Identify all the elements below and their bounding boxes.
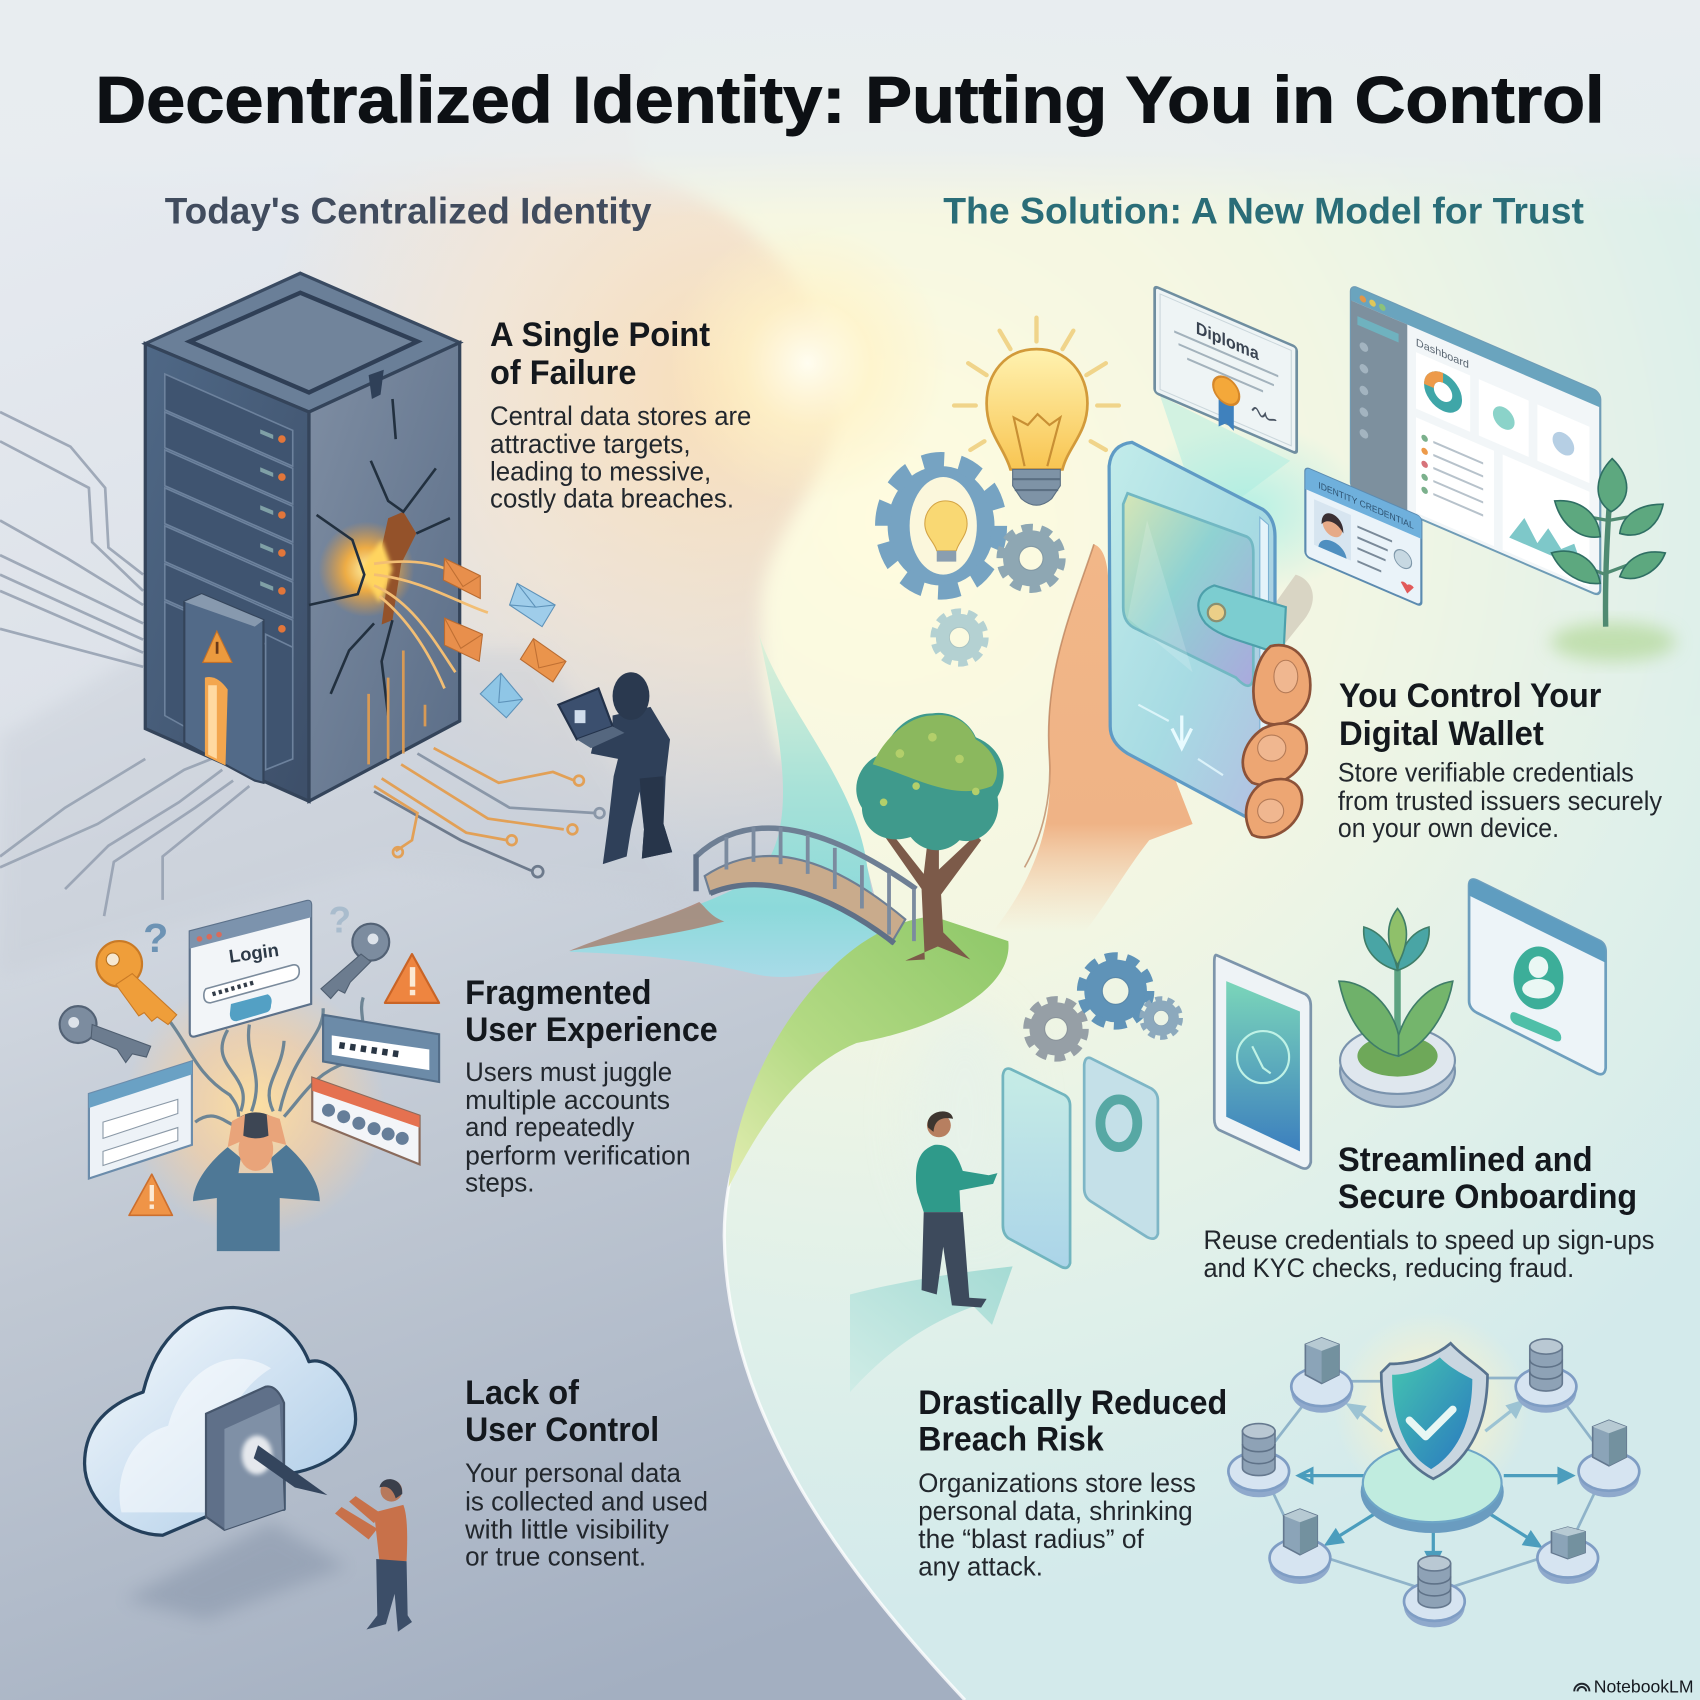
sapling beside dashboard: [1550, 459, 1676, 661]
stolen data envelopes: [443, 558, 566, 718]
text: drastically reduced breach risk: the “blast radius” of: [918, 1523, 1144, 1554]
blocked key arrow: [254, 1445, 327, 1495]
title: Decentralized Identity: Putting You in Control: [95, 64, 1605, 138]
text: a single point of failure: attractive targets,: [490, 428, 691, 459]
text: streamlined and secure onboarding: Secure Onboarding: [1338, 1178, 1637, 1216]
faded question mark: ?: [329, 899, 351, 940]
text: drastically reduced breach risk: Organizations store less: [918, 1467, 1196, 1498]
server breach light: [360, 540, 392, 603]
text: you control your digital wallet: on your own device.: [1338, 812, 1559, 843]
dashboard window: Dashboard: [1416, 337, 1469, 371]
orange key: [96, 941, 177, 1025]
network arrows: [1299, 1402, 1572, 1566]
text: drastically reduced breach risk: any attack.: [918, 1550, 1043, 1581]
background: floor shadow: [0, 651, 694, 976]
text: you control your digital wallet: from trusted issuers securely: [1338, 785, 1662, 816]
leaking data lines: [374, 562, 488, 688]
tree: [856, 713, 1004, 961]
server crack seam: [369, 370, 384, 399]
diploma credential: Diploma: [1196, 318, 1260, 364]
background: warm glow: [195, 0, 1062, 922]
background: white edge of path: [724, 1014, 965, 1700]
tablet with fingerprint: [1214, 955, 1311, 1169]
text: fragmented user experience: steps.: [465, 1167, 535, 1198]
ID credential card: [1305, 467, 1421, 606]
text: drastically reduced breach risk: Breach Risk: [918, 1421, 1104, 1459]
decentralized network diagram: [1228, 1312, 1639, 1627]
server crack opening: [382, 512, 416, 624]
cloud shadow: [125, 1522, 347, 1620]
text: a single point of failure: leading to messive,: [490, 455, 711, 486]
text: streamlined and secure onboarding: Streamlined and: [1338, 1141, 1593, 1179]
text: fragmented user experience: User Experience: [465, 1011, 718, 1049]
text: you control your digital wallet: Store verifiable credentials: [1338, 757, 1634, 788]
right column heading: The Solution: A New Model for Trust: [943, 190, 1584, 231]
text: lack of user control: is collected and used: [465, 1485, 708, 1516]
dashboard window: [1351, 285, 1600, 596]
text: drastically reduced breach risk: personal data, shrinking: [918, 1495, 1193, 1526]
text: lack of user control: Your personal data: [465, 1457, 682, 1488]
fragmented login illustration: [60, 899, 439, 1251]
text: lack of user control: or true consent.: [465, 1541, 646, 1572]
idea bulb: [954, 318, 1119, 505]
server top face: [145, 273, 460, 412]
text: lack of user control: Lack of: [465, 1374, 579, 1412]
text: a single point of failure: costly data breaches.: [490, 482, 734, 513]
key light: [242, 1435, 272, 1474]
text: streamlined and secure onboarding: and KYC checks, reducing fraud.: [1203, 1252, 1574, 1283]
wallet highlight: [1128, 520, 1193, 672]
wallet button: [1208, 604, 1225, 621]
gears with small bulb: [883, 461, 1062, 663]
text: a single point of failure: [490, 316, 751, 513]
river stream: [569, 634, 884, 977]
onboarding gears: [1027, 957, 1180, 1058]
text: drastically reduced breach risk: [918, 1384, 1227, 1581]
wallet strap: [1198, 585, 1286, 651]
background: solution side lower: [724, 716, 1700, 1700]
circuit traces under server: [374, 748, 604, 877]
text: fragmented user experience: and repeatedly: [465, 1111, 635, 1142]
ID credential card: IDENTITY CREDENTIAL: [1318, 480, 1414, 532]
platform: [1361, 1451, 1504, 1533]
text: a single point of failure: of Failure: [490, 354, 636, 392]
crack lines: [309, 399, 450, 716]
left column heading: Today's Centralized Identity: [165, 190, 652, 231]
background: lit ground patch: [911, 1008, 1019, 1225]
server breach glow: [319, 521, 414, 617]
network nodes: [1291, 1367, 1352, 1413]
text: lack of user control: with little visibility: [464, 1513, 669, 1544]
login window: Login: [227, 939, 280, 967]
glass panel one: [1003, 1069, 1070, 1268]
text: fragmented user experience: perform verification: [465, 1139, 691, 1170]
server rack slots: [165, 374, 293, 770]
red password window: [312, 1078, 420, 1164]
digital wallet phone: [1109, 442, 1286, 820]
onboarding path arrow: [850, 1266, 1013, 1392]
password bar: [323, 1015, 439, 1082]
phone side rim: [1260, 517, 1268, 811]
background: sun glow: [667, 222, 949, 504]
tangled wires: [168, 997, 363, 1126]
text: drastically reduced breach risk: Drastically Reduced: [918, 1384, 1227, 1422]
text: fragmented user experience: Users must juggle: [465, 1056, 672, 1087]
server left face: [145, 344, 309, 801]
person locked out: [335, 1479, 412, 1632]
river bank: [569, 902, 724, 951]
text: lack of user control: User Control: [465, 1411, 659, 1449]
circuit lines left of server: [0, 412, 249, 916]
network links: [1259, 1378, 1609, 1593]
server door with warning sign: [184, 594, 263, 783]
panel gear icon: [1100, 1099, 1137, 1147]
text: fragmented user experience: Fragmented: [465, 974, 652, 1012]
potted seedling: [1339, 909, 1455, 1107]
left account window: [89, 1061, 192, 1179]
hand holding wallet: [992, 544, 1313, 932]
shield with check: [1381, 1343, 1488, 1479]
sparkle around credentials: [1128, 423, 1366, 596]
down arrow on wallet: [1172, 716, 1192, 748]
server tower illustration: [145, 273, 488, 801]
background: solution side upper: [633, 0, 1700, 759]
network glow: [1335, 1312, 1530, 1507]
glass panel two: [1084, 1058, 1158, 1239]
server top screen: [190, 293, 417, 392]
text: lack of user control: [464, 1374, 708, 1572]
diploma credential: [1155, 286, 1297, 460]
text: you control your digital wallet: [1338, 677, 1662, 843]
hacker with laptop: [558, 672, 672, 864]
text: a single point of failure: A Single Point: [490, 316, 711, 354]
light beam to diploma: [1160, 396, 1290, 510]
NotebookLM mark: NotebookLM: [1594, 1676, 1693, 1696]
grey key right: [321, 924, 389, 999]
wallet flap: [1123, 493, 1253, 686]
padlock face: [224, 1404, 284, 1530]
warning triangle top right: [385, 954, 439, 1003]
text: fragmented user experience: multiple accounts: [465, 1084, 670, 1115]
molten drips: [369, 651, 425, 764]
text: streamlined and secure onboarding: [1203, 1141, 1654, 1283]
login window: [190, 901, 311, 1037]
text: fragmented user experience: [465, 974, 718, 1198]
server right face: [309, 343, 460, 801]
person at panels: [916, 1111, 997, 1308]
question marks: ?: [143, 915, 168, 961]
grassy hill: [729, 916, 1009, 1187]
footbridge: [696, 827, 916, 943]
background: top fade: [0, 0, 1700, 217]
user profile window: [1469, 879, 1606, 1074]
cloud padlock block: [206, 1386, 284, 1530]
stressed person: [193, 1112, 320, 1251]
text: streamlined and secure onboarding: Reuse credentials to speed up sign-ups: [1203, 1224, 1654, 1255]
warning triangle bottom: [129, 1174, 172, 1215]
text: a single point of failure: Central data stores are: [490, 400, 751, 431]
grey key left: [60, 1006, 151, 1062]
text: you control your digital wallet: Digital Wallet: [1339, 715, 1544, 753]
locked cloud: [85, 1308, 356, 1535]
text: you control your digital wallet: You Control Your: [1339, 677, 1601, 715]
gripping fingers: [1243, 645, 1310, 837]
